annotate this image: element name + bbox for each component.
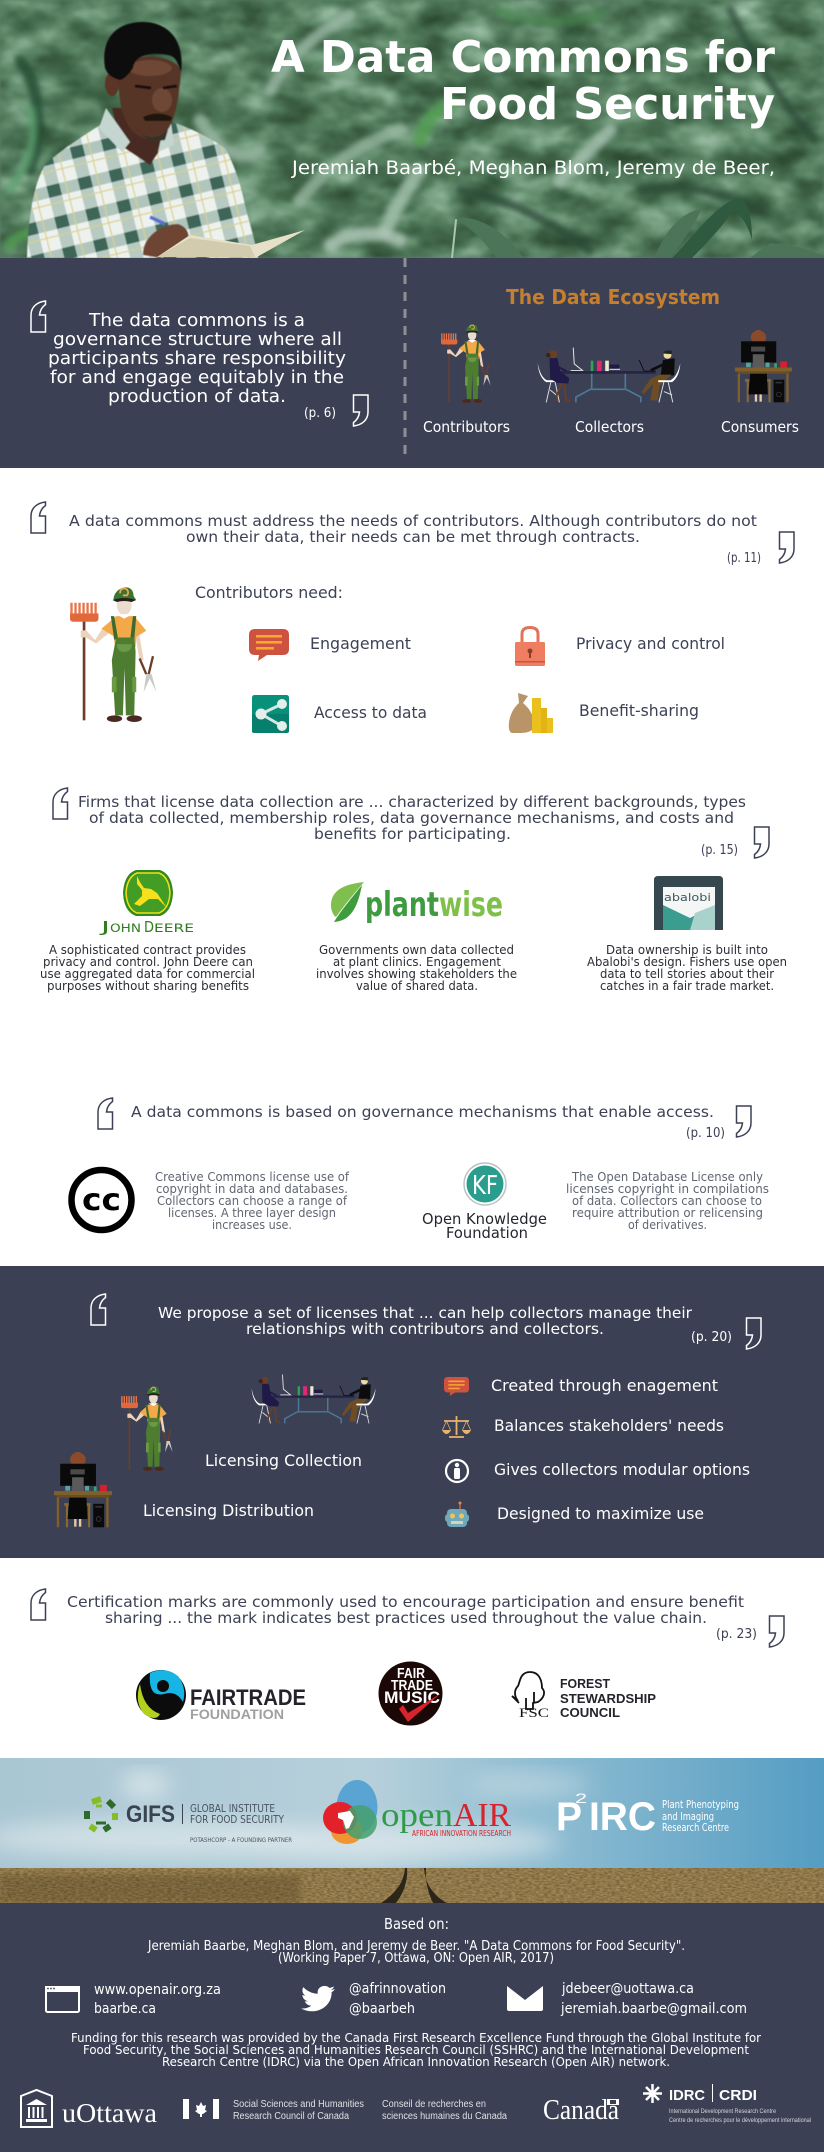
logo: openAIR: AIR [453,1797,511,1834]
text: funding statement: Food Security, the Social Sciences and Humanities Research Council (SSHRC) and the International Development [83,2042,749,2057]
quote: certification [31,1589,784,1647]
text: Plantwise: value of shared data. [356,979,478,993]
logo: John Deere [99,870,194,936]
text: Creative Commons: copyright in data and databases. [156,1182,348,1196]
logo: Fair Trade Music: TRADE [391,1677,433,1694]
text: John Deere [40,943,255,993]
photo: corn field background [0,0,824,258]
logo: GIFS: POTASHCORP - A FOUNDING PARTNER [190,1837,292,1844]
panel: data commons definition and ecosystem [0,258,824,468]
panel: firms that license data collection [40,788,787,993]
item: privacy and control: Privacy and control [576,634,725,653]
logo: IDRC CRDI [643,2084,811,2124]
title: A Data Commons for [271,32,775,83]
quote: needs of contributors [31,502,794,566]
quote: definition: governance structure where all [53,329,342,350]
logo: Plantwise: wise [439,885,503,925]
contact: websites: baarbe.ca [94,2001,156,2017]
contact: email [507,1981,747,2017]
text: Open Database License: of derivatives. [628,1218,707,1232]
quote: needs of contributors: own their data, their needs can be met through contracts. [186,528,640,546]
text: Abalobi: Data ownership is built into [606,943,768,957]
quote: governance [98,1098,751,1141]
title [271,32,775,130]
quote: licenses: relationships with contributors and collectors. [246,1320,604,1338]
text: John Deere: use aggregated data for commercial [40,967,255,981]
logo: SSHRC: Conseil de recherches en [382,2099,486,2110]
logo: P2IRC: P [556,1795,582,1839]
quote: licenses: We propose a set of licenses that ... can help collectors manage their [158,1304,693,1322]
logo: Fairtrade Foundation [136,1670,306,1722]
logo: Fairtrade Foundation: FOUNDATION [190,1706,284,1722]
text: Open Database License: of data. Collectors can choose to [572,1194,762,1208]
text: Plantwise: involves showing stakeholders the [316,967,517,981]
quote: certification: (p. 23) [716,1627,757,1642]
logo: IDRC CRDI: International Development Research Centre [669,2109,777,2115]
consumers figure and label [721,330,799,436]
quote: needs of contributors: (p. 11) [727,551,761,566]
illustration: contributor [70,587,156,722]
logo: IDRC CRDI: Centre de recherches pour le développement international [669,2118,811,2124]
text: Plantwise: Governments own data collected [319,943,514,957]
quote: firms: (p. 15) [701,843,738,858]
panel: certification marks [31,1589,784,1726]
quote: definition: The data commons is a [88,310,305,331]
logo: P2IRC: Research Centre [662,1822,729,1834]
photo: sky and field [0,1758,824,1903]
logo: Canada wordmark: Canada [543,2095,620,2126]
logo: SSHRC: sciences humaines du Canada [382,2111,507,2122]
logo: Plantwise [331,882,503,925]
text: funding statement [71,2030,762,2069]
item: maximize use: Designed to maximize use [497,1504,704,1523]
item: access to data: Access to data [314,703,427,722]
item: benefit-sharing [509,693,699,733]
logo: P2IRC: Plant Phenotyping [662,1799,739,1811]
contact: email: jeremiah.baarbe@gmail.com [560,2001,747,2017]
logo: uOttawa: uOttawa [62,2098,157,2128]
text: based on citation [147,1915,685,1966]
item: balances needs: Balances stakeholders' needs [494,1416,724,1435]
logo: openAIR: open [381,1797,453,1834]
text: Abalobi: Abalobi's design. Fishers use open [587,955,787,969]
logo: SSHRC [183,2099,507,2122]
quote: firms: Firms that license data collection are ... characterized by different backgrounds, types [78,793,746,811]
item: created through engagement: Created through enagement [491,1376,718,1395]
logo: Creative Commons: cc [82,1183,121,1218]
logo: IDRC CRDI: CRDI [719,2087,757,2104]
text: John Deere: purposes without sharing benefits [47,979,249,993]
logo: Abalobi app [654,876,723,930]
logo: Forest Stewardship Council: COUNCIL [560,1705,620,1720]
text: based on citation: Based on: [384,1915,449,1933]
logo: Forest Stewardship Council: STEWARDSHIP [560,1691,656,1706]
logo: P2IRC: 2 [575,1790,587,1806]
text: Creative Commons: Creative Commons license use of [155,1170,350,1184]
quote: licenses [91,1294,761,1349]
item: benefit-sharing: Benefit-sharing [579,701,699,720]
logo: John Deere: J [99,918,110,936]
contact: websites [45,1982,221,2017]
logo: Fair Trade Music: FAIR [397,1665,425,1682]
authors: Jeremiah Baarbé, Meghan Blom, Jeremy de Beer, [291,157,775,179]
text: based on citation: Jeremiah Baarbe, Meghan Blom, and Jeremy de Beer. "A Data Commons for Food Security". [147,1939,685,1954]
logo: SSHRC: Research Council of Canada [233,2111,349,2122]
quote: certification: sharing ... the mark indicates best practices used throughout the value chain. [105,1609,707,1627]
illustration: licensing collection [121,1375,376,1471]
quote: needs of contributors: A data commons must address the needs of contributors. Although contributors do not [69,512,757,530]
panel: partners banner [0,1758,824,1903]
item: privacy and control [515,628,725,666]
logo: openAIR [323,1780,511,1844]
contact: websites: www.openair.org.za [94,1982,221,1998]
logo: Fairtrade Foundation: FAIRTRADE [190,1685,306,1710]
quote: governance: (p. 10) [686,1126,725,1141]
quote: definition: for and engage equitably in the [50,367,344,388]
quote: definition: production of data. [108,386,286,407]
quote: certification: Certification marks are commonly used to encourage participation and ensure benefit [67,1593,744,1611]
logo: John Deere: D [144,918,154,936]
logo: John Deere: EERE [154,921,194,935]
quote: governance: A data commons is based on governance mechanisms that enable access. [131,1103,714,1121]
text: funding statement: Funding for this research was provided by the Canada First Research Excellence Fund through the Global Institute for [71,2030,762,2045]
logo: GIFS: GIFS [126,1801,175,1828]
logo: Open Knowledge Foundation: Foundation [446,1224,528,1242]
text: based on citation: (Working Paper 7, Ottawa, ON: Open AIR, 2017) [278,1951,554,1966]
logo: P2IRC: and Imaging [662,1811,714,1823]
text: Abalobi [587,943,787,993]
text: Plantwise [316,943,517,993]
illustration: licensing distribution [54,1452,314,1527]
contact: twitter: @afrinnovation [349,1981,446,1997]
text: Creative Commons [155,1170,350,1232]
logo: Fair Trade Music: MUSIC [384,1688,440,1707]
panel: proposed licenses [0,1266,824,1558]
illustration: licensing distribution: Licensing Distribution [143,1501,314,1520]
logo: Open Knowledge Foundation: KF [472,1171,498,1201]
logo: Open Knowledge Foundation [422,1163,547,1242]
panel: governance mechanisms [72,1098,769,1242]
logo: GIFS [87,1799,292,1844]
contributors figure and label [423,324,510,436]
collectors figure and label [538,348,680,436]
logo: John Deere: OHN [110,921,141,935]
item: engagement: Engagement [310,634,411,653]
title: Food Security [440,79,775,130]
contributors figure and label: Contributors [423,418,510,436]
text: Creative Commons: increases use. [212,1218,292,1232]
contact: email: jdebeer@uottawa.ca [561,1981,694,1997]
logo: GIFS: GLOBAL INSTITUTE [190,1802,275,1815]
logo: Forest Stewardship Council: FSC [519,1705,549,1720]
logo: Abalobi app: abalobi [664,891,711,904]
item: modular options: Gives collectors modular options [494,1460,750,1479]
quote: licenses: (p. 20) [691,1330,732,1345]
logo: Plantwise: plant [365,885,439,925]
text: Open Database License: The Open Database License only [571,1170,763,1184]
collectors figure and label: Collectors [575,418,644,436]
contact: twitter [301,1981,446,2017]
illustration: licensing collection: Licensing Collection [205,1451,362,1470]
quote: firms [53,788,769,858]
logo: uOttawa [21,2090,157,2128]
text: Open Database License: licenses copyright in compilations [566,1182,769,1196]
logo: Creative Commons [72,1170,132,1230]
logo: P2IRC: IRC [589,1795,656,1839]
text: Open Database License: require attribution or relicensing [572,1206,763,1220]
quote: definition [31,301,368,426]
photo: farmer writing in notebook [27,22,305,258]
logo: GIFS: FOR FOOD SECURITY [190,1813,284,1826]
subheading: contributors need: Contributors need: [195,583,343,602]
text: Creative Commons: licenses. A three layer design [168,1206,336,1220]
text: John Deere: A sophisticated contract provides [49,943,246,957]
logo: SSHRC: Social Sciences and Humanities [233,2099,364,2110]
text: Abalobi: catches in a fair trade market. [600,979,774,993]
contact: twitter: @baarbeh [349,2001,415,2017]
logo: IDRC CRDI: IDRC [669,2087,705,2104]
text: funding statement: Research Centre (IDRC) via the Open African Innovation Research (Open AIR) network. [162,2054,670,2069]
quote: definition: (p. 6) [304,406,336,421]
text: Creative Commons: Collectors can choose a range of [157,1194,348,1208]
consumers figure and label: Consumers [721,418,799,436]
heading: the data ecosystem: The Data Ecosystem [506,285,720,309]
logo: Forest Stewardship Council: FOREST [560,1676,610,1691]
logo: openAIR: AFRICAN INNOVATION RESEARCH [412,1829,511,1838]
item: maximize use [445,1502,704,1527]
logo: Fair Trade Music [378,1662,442,1726]
text: Abalobi: data to tell stories about their [600,967,774,981]
panel: header photo [0,0,824,258]
text: Open Database License [566,1170,769,1232]
panel: footer [0,1903,824,2152]
item: engagement [249,629,411,661]
quote: firms: of data collected, membership roles, data governance mechanisms, and costs and [89,809,734,827]
logo: Open Knowledge Foundation: Open Knowledge [422,1210,547,1228]
panel: contributors needs [31,502,794,733]
item: access to data [252,695,427,733]
logo: P2IRC [556,1790,739,1839]
text: John Deere: privacy and control. John Deere can [43,955,253,969]
text: Plantwise: at plant clinics. Engagement [333,955,501,969]
logo: Forest Stewardship Council [512,1672,656,1720]
quote: definition: participants share responsibility [48,348,346,369]
quote: firms: benefits for participating. [314,825,511,843]
